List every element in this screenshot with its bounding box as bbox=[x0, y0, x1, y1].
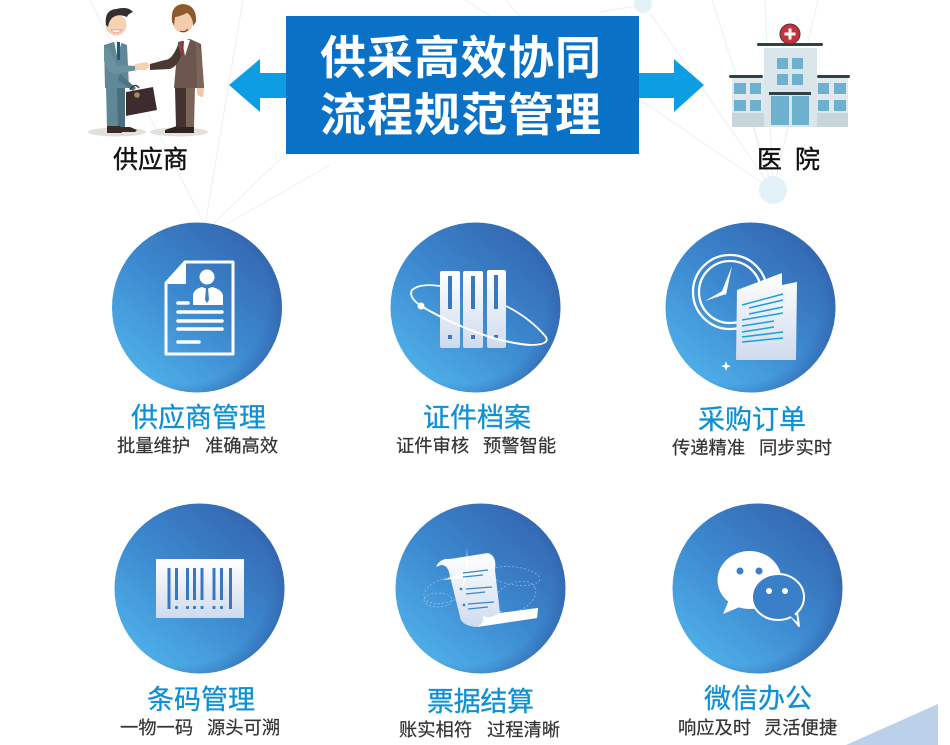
icon circle: chat bubbles bbox=[672, 504, 842, 674]
subtext: 批量维护 bbox=[117, 435, 190, 456]
subtext: 一物一码 bbox=[120, 717, 193, 738]
heading: 票据结算 bbox=[427, 687, 534, 717]
subtext: 预警智能 bbox=[483, 435, 556, 456]
icon: supplier handshake bbox=[88, 4, 208, 136]
icon circle: resume document bbox=[112, 222, 282, 392]
title line 2: 流程规范管理 bbox=[320, 89, 601, 141]
heading: 采购订单 bbox=[698, 405, 806, 435]
right man bbox=[150, 4, 204, 133]
right arrow bbox=[635, 59, 704, 112]
subtext: 过程清晰 bbox=[487, 719, 560, 740]
left arrow bbox=[229, 59, 290, 112]
icon circle: clock and document bbox=[666, 222, 836, 392]
icon circle: binders bbox=[390, 222, 560, 392]
left man bbox=[104, 8, 150, 133]
subtext: 准确高效 bbox=[205, 435, 278, 456]
icon circle: paper scroll bbox=[396, 504, 566, 674]
heading: 证件档案 bbox=[423, 403, 531, 433]
panel: supplier management bbox=[112, 222, 282, 456]
corner triangle bbox=[846, 704, 938, 745]
subtext: 响应及时 bbox=[678, 717, 751, 738]
panel: WeChat office bbox=[672, 504, 842, 738]
title box bbox=[286, 16, 639, 154]
network nodes bbox=[634, 0, 787, 204]
title line 1: 供采高效协同 bbox=[320, 32, 601, 84]
hospital label: 医 院 bbox=[757, 146, 820, 174]
icon: hospital bbox=[729, 24, 850, 127]
panel: invoice settlement bbox=[396, 504, 566, 740]
subtext: 源头可溯 bbox=[207, 717, 280, 738]
panel: barcode management bbox=[114, 504, 284, 738]
heading: 微信办公 bbox=[704, 684, 812, 714]
supplier label: 供应商 bbox=[113, 146, 188, 174]
panel: certificate archive bbox=[390, 222, 560, 456]
heading: 条码管理 bbox=[147, 685, 255, 715]
subtext: 灵活便捷 bbox=[764, 717, 837, 738]
subtext: 传递精准 bbox=[672, 437, 745, 458]
subtext: 证件审核 bbox=[396, 435, 469, 456]
panel: purchase order bbox=[666, 222, 836, 458]
subtext: 账实相符 bbox=[399, 719, 472, 740]
briefcase bbox=[126, 87, 157, 116]
background network lines bbox=[90, 0, 818, 225]
icon circle: barcode bbox=[114, 504, 284, 674]
subtext: 同步实时 bbox=[759, 437, 832, 458]
heading: 供应商管理 bbox=[131, 403, 266, 433]
